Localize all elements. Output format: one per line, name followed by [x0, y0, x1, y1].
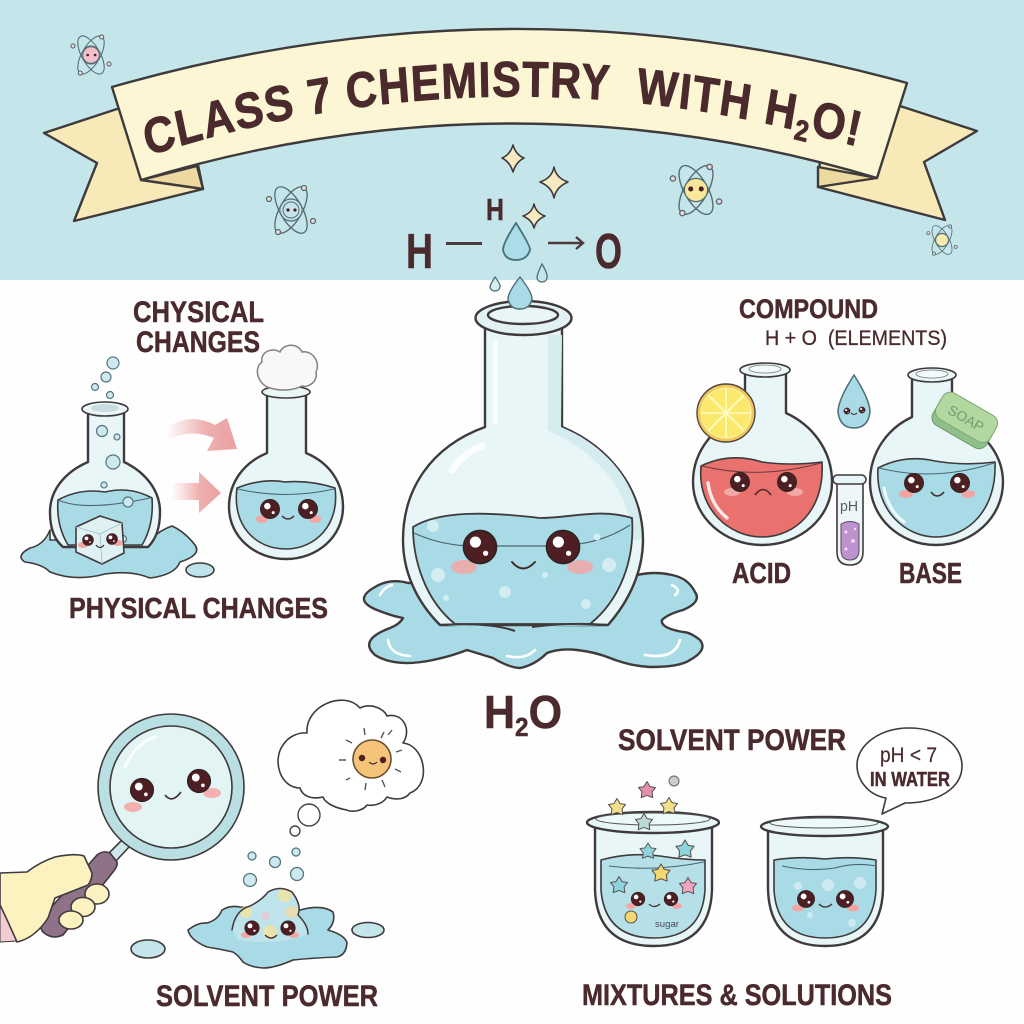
- heading: Chysical Changes: [133, 296, 264, 359]
- label: Acid: ACID: [732, 558, 791, 590]
- title text: 2: [794, 120, 809, 142]
- small drop right: [537, 264, 547, 282]
- line 1: CHYSICAL: [133, 296, 264, 329]
- pH test tube: [833, 475, 866, 565]
- left blush: [256, 515, 268, 523]
- blob: [232, 888, 308, 942]
- rim inner: [596, 813, 710, 825]
- arrow: [548, 237, 583, 249]
- subheading: H + O (Elements): H + O (ELEMENTS): [765, 327, 947, 350]
- flask glass: [403, 325, 643, 625]
- pink arrow curved: [166, 418, 237, 451]
- left eye: [904, 474, 924, 492]
- bubbles: [427, 520, 616, 609]
- page background: [0, 280, 1024, 1024]
- beaker with water: [761, 817, 888, 946]
- label: Solvent Power bottom: SOLVENT POWER: [156, 980, 378, 1013]
- surface: [609, 862, 704, 868]
- sparkle middle: [540, 167, 568, 198]
- lens highlight: [125, 737, 155, 767]
- ribbon left tail: [44, 108, 203, 221]
- right eye: [546, 530, 580, 564]
- sun face: [359, 755, 386, 764]
- letter H top: H: [486, 192, 504, 227]
- drop: [838, 375, 870, 428]
- water surface line: [414, 525, 630, 546]
- blush right: [847, 904, 859, 912]
- thought cloud with sun: [278, 700, 423, 836]
- steam cloud: [257, 345, 317, 390]
- puddle drop: [186, 563, 214, 577]
- blob outline: [232, 888, 308, 934]
- blush right: [672, 903, 682, 909]
- blush right: [961, 490, 975, 498]
- water: [774, 858, 876, 938]
- handle neck: [107, 838, 130, 862]
- hand handle: [40, 852, 117, 937]
- atom icon: yellow: [670, 161, 722, 219]
- left blush: [124, 802, 142, 812]
- magnifying glass and hand: [0, 714, 244, 942]
- drop right: [352, 922, 384, 938]
- finger 3: [59, 911, 83, 929]
- ice cube: [76, 516, 124, 564]
- acid flask: [693, 363, 832, 545]
- liquid surface: [879, 463, 994, 474]
- tube rim: [833, 475, 866, 484]
- rim opening: [749, 365, 781, 373]
- left eye: [730, 472, 750, 492]
- ribbon right tail: [818, 106, 977, 220]
- lens: [110, 726, 232, 848]
- label: Physical Changes: PHYSICAL CHANGES: [69, 593, 328, 625]
- right blush: [203, 788, 221, 798]
- water: [601, 855, 705, 938]
- speech bubble: [857, 728, 962, 814]
- smile: [512, 562, 535, 568]
- yellow ball: [625, 911, 637, 923]
- rim: [82, 402, 128, 416]
- flask glass: [50, 412, 160, 547]
- liquid surface: [702, 463, 821, 472]
- surface: [782, 864, 876, 870]
- rim inner: [770, 818, 878, 828]
- sparkle top: [502, 145, 524, 172]
- title ribbon banner: [42, 28, 978, 222]
- header background band: [0, 0, 1024, 280]
- pink arrow straight: [172, 472, 221, 513]
- left eye: [798, 890, 814, 908]
- line 2: CHANGES: [136, 326, 260, 359]
- atom icon: left: [266, 182, 316, 238]
- finger 2: [71, 898, 95, 916]
- drop above flask: [508, 277, 532, 309]
- flask glass: [229, 394, 343, 559]
- beaker with stars: [587, 776, 719, 946]
- beaker glass: [768, 828, 883, 946]
- neck highlight: [493, 340, 498, 425]
- smile: [931, 492, 944, 496]
- rising bubbles: [244, 848, 304, 886]
- right eye: [950, 474, 970, 492]
- flask glass: [693, 372, 832, 545]
- dissolving blob in puddle: [188, 888, 347, 968]
- pH label: pH: [840, 498, 858, 515]
- bubbles: [92, 357, 133, 542]
- base flask: [870, 368, 1003, 545]
- left eye: [260, 500, 280, 518]
- lens frame: [98, 714, 244, 860]
- drop left: [131, 940, 165, 958]
- left eye: [464, 530, 496, 564]
- water: [413, 514, 632, 624]
- blush right: [787, 488, 803, 496]
- puddle: [364, 573, 702, 668]
- label H2O: H: [484, 686, 517, 738]
- letter O: O: [595, 225, 622, 279]
- label: Mixtures and Solutions: MIXTURES & SOLUTIONS: [582, 979, 892, 1012]
- label H2O: 2: [515, 712, 529, 742]
- right eye: [281, 921, 295, 935]
- atom icon: pink: [71, 32, 111, 78]
- rim: [740, 363, 790, 377]
- flask rim: [476, 301, 572, 335]
- right eye: [188, 770, 210, 792]
- molecule formula H-O: [406, 192, 622, 279]
- physical changes: steam flask: [229, 345, 343, 559]
- pH text: pH < 7: [880, 744, 937, 767]
- label H2O: O: [529, 686, 562, 738]
- letter H left: H: [406, 225, 433, 279]
- soap bar: SOAP: [945, 402, 987, 435]
- surface: [238, 489, 334, 494]
- highlight: [884, 488, 904, 522]
- sparkles in water: [794, 877, 866, 927]
- left eye: [130, 778, 154, 802]
- bond dash: [446, 242, 482, 245]
- right blush: [309, 515, 321, 523]
- right eye: [778, 472, 796, 492]
- ribbon right fold: [818, 167, 877, 187]
- sun rays: [339, 728, 402, 790]
- puddle highlights: [380, 585, 680, 657]
- title text: O!: [814, 102, 861, 146]
- blob blush left: [241, 932, 251, 938]
- beaker glass: [595, 825, 712, 946]
- highlight: [708, 483, 727, 518]
- bubble shape: [857, 728, 962, 814]
- water: [58, 490, 152, 545]
- right blush: [567, 560, 593, 574]
- acid liquid: [701, 458, 822, 537]
- sparkle lower: [523, 204, 545, 228]
- puddle: [188, 906, 347, 968]
- cube face: [78, 534, 123, 548]
- blush left: [899, 490, 913, 498]
- lemon slice: [697, 384, 755, 442]
- liquid dots: [844, 528, 856, 550]
- flask inner rim: [488, 306, 558, 324]
- surface: [58, 498, 150, 506]
- water drop character: [838, 375, 870, 428]
- water drop: [503, 223, 530, 260]
- left eye: [631, 892, 645, 906]
- smile: [265, 935, 277, 938]
- blush left: [724, 488, 740, 496]
- smile: [649, 904, 660, 906]
- heading: Solvent Power top: SOLVENT POWER: [618, 724, 846, 757]
- frown: [755, 490, 771, 495]
- sugar label: sugar: [655, 919, 679, 929]
- highlight: [452, 446, 482, 470]
- thought bubbles: [290, 804, 320, 836]
- blush left: [792, 904, 804, 912]
- flask shading: [548, 335, 641, 540]
- right eye: [664, 892, 678, 906]
- rim opening: [916, 370, 948, 378]
- in water text: IN WATER: [870, 769, 950, 791]
- ribbon left fold: [141, 166, 203, 189]
- purple liquid: [841, 522, 859, 560]
- puddle: [21, 526, 197, 578]
- base liquid: [878, 459, 995, 537]
- grey bubble: [669, 776, 679, 786]
- smile: [165, 792, 181, 799]
- left eye: [245, 921, 259, 935]
- smile: [819, 904, 832, 907]
- flask glass: [870, 376, 1003, 545]
- blush left: [626, 903, 636, 909]
- tube: [837, 480, 863, 565]
- face: [844, 407, 865, 414]
- smile: [282, 516, 294, 519]
- atom icon: small right: [927, 223, 957, 257]
- soap bar: [929, 389, 1001, 452]
- ribbon centre panel: [112, 29, 907, 180]
- central H2O flask with puddle: [364, 301, 702, 668]
- rim: [262, 386, 310, 398]
- stars: [608, 782, 696, 894]
- rim opening: [91, 404, 119, 412]
- heading: Compound: COMPOUND: [739, 294, 878, 324]
- puddle foot line: [440, 624, 608, 631]
- water: [236, 481, 336, 549]
- right eye: [836, 890, 854, 908]
- blob colour spots: [240, 888, 298, 939]
- cube top edges: [76, 523, 122, 564]
- right eye: [298, 500, 318, 518]
- rim: [761, 817, 888, 836]
- rim: [587, 812, 719, 833]
- blob blush right: [289, 932, 299, 938]
- sun: [353, 740, 391, 778]
- sleeve cuff: [0, 905, 17, 942]
- finger 1: [85, 884, 109, 904]
- left blush: [451, 560, 477, 574]
- hand: [0, 855, 92, 942]
- small drop left: [490, 277, 500, 291]
- label: Base: BASE: [899, 558, 962, 590]
- physical changes: ice flask: [21, 357, 214, 578]
- rim: [908, 368, 956, 382]
- cloud: [278, 700, 423, 811]
- title text: CLASS 7 CHEMISTRY WITH H: [144, 61, 797, 153]
